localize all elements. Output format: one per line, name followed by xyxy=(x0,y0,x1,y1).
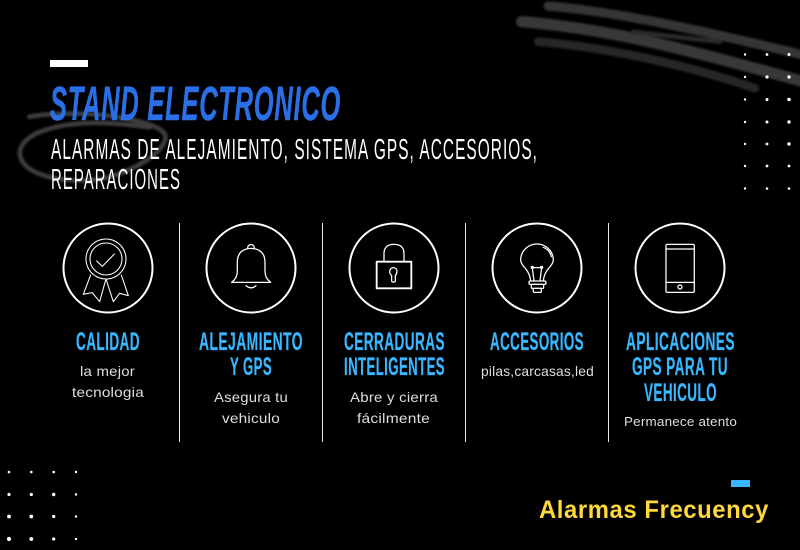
title: STAND ELECTRONICO xyxy=(50,78,341,131)
brush scribble behind subtitle xyxy=(20,114,166,180)
dot grid: bottom left xyxy=(7,471,77,541)
panel: aplicaciones xyxy=(624,224,737,429)
text: cerraduras: Abre y cierra xyxy=(350,389,438,405)
heading: alejamiento: ALEJAMIENTO xyxy=(199,328,303,356)
panel: accesorios xyxy=(481,224,594,379)
text: alejamiento: Asegura tu xyxy=(214,389,288,405)
text: accesorios: pilas,carcasas,led xyxy=(481,363,594,379)
heading: cerraduras: CERRADURAS xyxy=(344,328,445,356)
heading: cerraduras xyxy=(344,328,445,381)
text: aplicaciones: Permanece atento xyxy=(624,414,737,429)
brush strokes: top right xyxy=(522,6,800,88)
heading: aplicaciones xyxy=(626,328,735,407)
dot grid: top right xyxy=(744,53,791,190)
text: alejamiento: vehiculo xyxy=(222,410,280,426)
heading: aplicaciones: VEHICULO xyxy=(644,379,717,407)
panel: alejamiento xyxy=(199,224,303,426)
accent bar: blue xyxy=(731,480,750,487)
icon: light bulb xyxy=(492,224,582,312)
text: calidad xyxy=(72,363,144,400)
text: alejamiento xyxy=(214,389,288,426)
panel: calidad xyxy=(64,224,152,400)
heading: accesorios: ACCESORIOS xyxy=(490,328,584,356)
text: cerraduras: fácilmente xyxy=(357,410,430,426)
icon: smartphone xyxy=(636,224,724,312)
subtitle: REPARACIONES xyxy=(51,164,181,196)
panel: cerraduras xyxy=(344,224,445,426)
text: calidad: la mejor xyxy=(80,363,135,379)
heading: cerraduras: INTELIGENTES xyxy=(344,353,445,381)
heading: alejamiento xyxy=(199,328,303,381)
brand name: Alarmas Frecuency xyxy=(539,496,769,524)
accent bar: white xyxy=(50,60,88,67)
icon: bell xyxy=(206,224,296,312)
icon: ribbon award xyxy=(64,224,152,312)
heading: alejamiento: Y GPS xyxy=(230,353,272,381)
heading: calidad: CALIDAD xyxy=(76,328,140,356)
text: cerraduras xyxy=(350,389,438,426)
subtitle xyxy=(51,134,538,196)
icon: padlock xyxy=(350,224,438,312)
column dividers xyxy=(180,223,608,442)
text: calidad: tecnologia xyxy=(72,384,144,400)
